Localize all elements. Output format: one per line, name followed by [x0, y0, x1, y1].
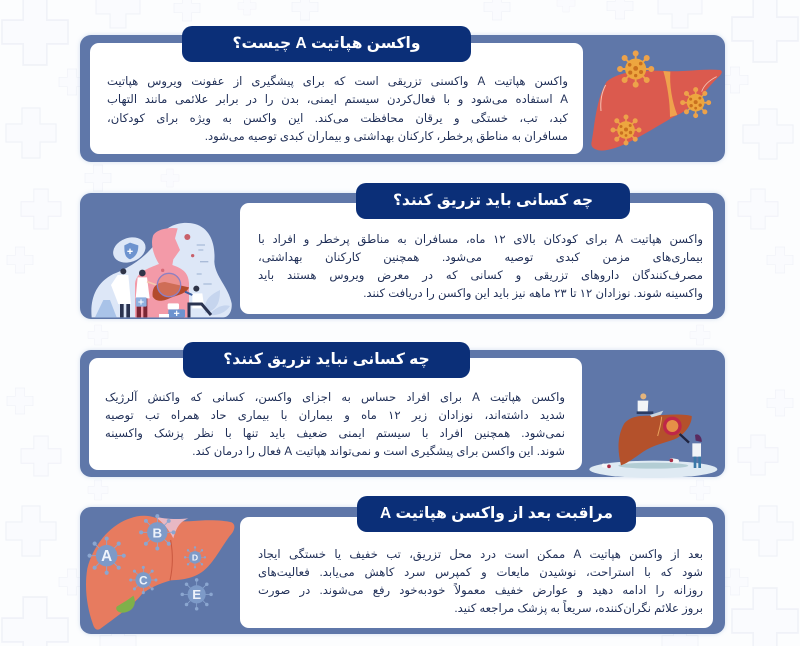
- heading: [357, 496, 636, 532]
- liver shape: [591, 70, 722, 151]
- body text: [258, 233, 703, 300]
- doctor right: [139, 270, 146, 276]
- illustration: liver with hepatitis viruses: C: [139, 573, 148, 587]
- body text: مسافران به مناطق پرخطر، کارکنان بهداشتی و بیماران کبدی توصیه می‌شود.: [205, 130, 568, 143]
- pale blob: [91, 223, 232, 317]
- body text: واکسن هپاتیت A برای افراد حساس به اجزای واکسن، کسانی که واکنش آلرژیک: [105, 391, 565, 404]
- body text: واکسن هپاتیت A برای کودکان بالای ۱۲ ماه، مسافران به مناطق پرخطر و افراد با: [258, 233, 703, 246]
- heading: [182, 26, 471, 62]
- heading: مراقبت بعد از واکسن هپاتیت A: [380, 505, 613, 522]
- panel background: [80, 350, 725, 477]
- liver shape: [86, 516, 234, 630]
- illustration: liver under magnifier with doctors: [589, 393, 718, 478]
- illustration: liver with hepatitis viruses: E: [192, 587, 201, 602]
- body text: واکسن هپاتیت A واکسنی تزریقی است که برای پیشگیری از عفونت ویروس هپاتیت: [107, 75, 568, 88]
- heading: [356, 183, 630, 219]
- body text: [107, 74, 568, 143]
- body text: بعد از واکسن هپاتیت A ممکن است درد محل تزریق، تب خفیف یا خستگی ایجاد: [258, 548, 703, 561]
- panel: care after vaccination: [78, 496, 727, 636]
- body text: کبد، تب، خستگی و یرقان محافظت می‌کند. این واکسن به ویژه برای کودکان،: [107, 112, 568, 125]
- body text: A استفاده می‌شود و با فعال‌کردن سیستم ایمنی، بدن را در برابر علائمی مانند التهاب: [107, 93, 568, 106]
- body text: روزانه را ادامه دهید و عوارض خفیف معمولاً خودبه‌خود رفع می‌شوند. در صورت: [258, 584, 703, 597]
- body text: نمی‌شود. همچنین افراد با سیستم ایمنی ضعیف باید تنها با نظر پزشک واکسینه: [105, 427, 565, 440]
- text card: [89, 358, 582, 470]
- leaf: [205, 290, 220, 313]
- pink silhouette: [135, 228, 189, 317]
- body text: [258, 548, 703, 615]
- text card: [240, 517, 713, 628]
- body text: شدید داشته‌اند، نوزادان زیر ۱۲ ماه و بیماران با بیماری حاد همراه تب توصیه: [105, 409, 565, 422]
- illustration: liver with hepatitis viruses: A: [101, 548, 112, 565]
- illustration: liver with hepatitis viruses: [86, 514, 234, 630]
- illustration: liver with hepatitis viruses: B: [153, 525, 163, 540]
- liver and magnifier: [153, 282, 189, 301]
- text card: [90, 43, 583, 154]
- text card: [240, 203, 713, 314]
- body text: شود که با استراحت، نوشیدن مایعات و کمپرس سرد کاهش می‌یابد. فعالیت‌های: [258, 566, 703, 579]
- body text: بیماری‌های مزمن کبدی توصیه می‌شود. همچنین کارکنان بهداشتی،: [258, 251, 703, 264]
- panel background: [80, 193, 725, 319]
- heading: واکسن هپاتیت A چیست؟: [233, 35, 420, 52]
- heading: چه کسانی باید تزریق کنند؟: [393, 192, 593, 209]
- illustration: liver with hepatitis viruses: D: [192, 553, 198, 563]
- body text: شوند. این واکسن برای پیشگیری است و نمی‌تواند هپاتیت A فعال را درمان کند.: [192, 445, 565, 458]
- panel: what is hepatitis A vaccine: [78, 26, 727, 164]
- doctor left: [120, 268, 126, 274]
- illustration: doctors examining liver: [91, 222, 232, 318]
- pills: [168, 309, 185, 317]
- icon: liver with orange viruses: [591, 50, 722, 151]
- person with magnifier: [695, 434, 702, 442]
- heading: چه کسانی نباید تزریق کنند؟: [223, 351, 430, 368]
- body text: بروز علائم نگران‌کننده، سریعاً به پزشک مراجعه کنید.: [454, 602, 703, 615]
- body text: [105, 390, 565, 458]
- panel: who should not get vaccinated: [78, 342, 727, 479]
- body text: مصرف‌کنندگان داروهای تزریقی و کسانی که در معرض ویروس هستند باید: [258, 269, 703, 282]
- panel background: [80, 507, 725, 634]
- pills: [601, 463, 611, 469]
- panel background: [80, 35, 725, 162]
- person sitting on liver: [640, 393, 646, 399]
- gallbladder: [116, 596, 135, 613]
- sitting doctor: [193, 286, 199, 292]
- heading: [183, 342, 470, 378]
- body text: واکسینه شوند. نوزادان ۱۲ تا ۲۳ ماهه نیز باید این واکسن را دریافت کنند.: [363, 287, 703, 300]
- panel: who should get vaccinated: [78, 183, 727, 321]
- shield: [124, 243, 138, 259]
- flask: [95, 300, 117, 317]
